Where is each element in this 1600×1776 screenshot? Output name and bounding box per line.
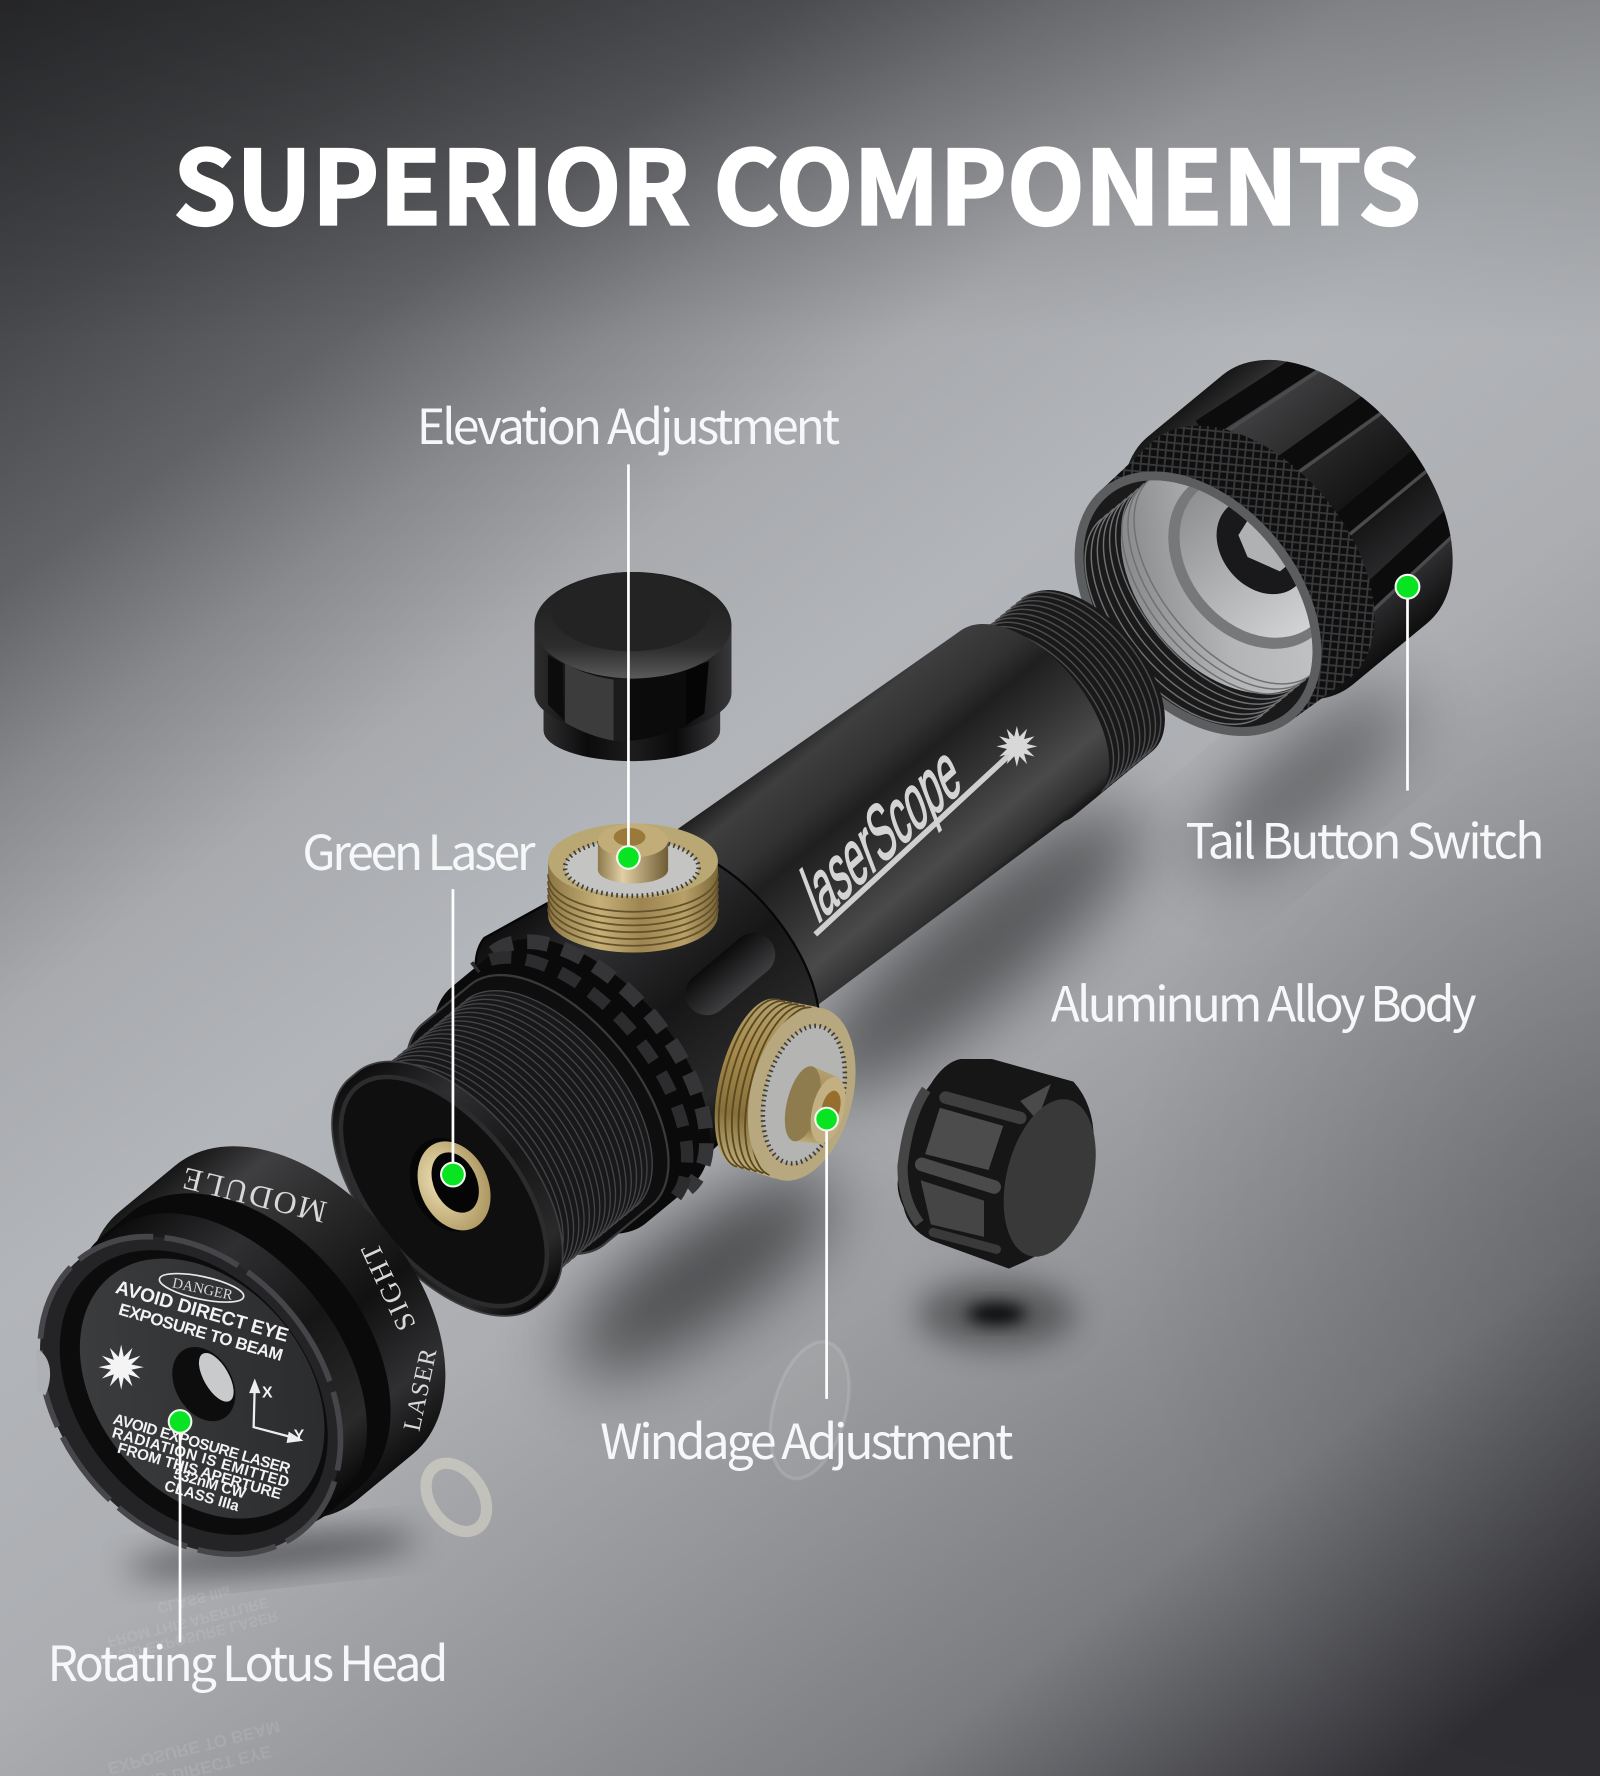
leader: green laser [452, 889, 454, 1175]
lotus side engraving [177, 1160, 443, 1434]
aluminum alloy tube [592, 571, 1141, 1084]
label: tail button switch: Tail Button Switch [1186, 803, 1545, 873]
label: elevation adjustment: Elevation Adjustment [417, 388, 840, 458]
label: rotating lotus head: Rotating Lotus Head [48, 1625, 448, 1695]
marker dots [169, 575, 1419, 1433]
front face [302, 1041, 586, 1343]
label: green laser: Green Laser [302, 814, 536, 884]
cap wall [534, 625, 731, 734]
cap top [551, 572, 710, 651]
lotus side engraving: MODULE [177, 1160, 330, 1230]
leader: rotating lotus head [179, 1421, 181, 1642]
floor reflections: AVOID EXPOSURE LASER [96, 1607, 280, 1667]
cap chamfer highlight [1020, 1084, 1051, 1120]
lotus face markings: Y [294, 1428, 305, 1445]
adjustment block [436, 787, 866, 1218]
groove band [11, 1137, 450, 1588]
side brass turret [699, 988, 873, 1192]
lotus face markings: EXPOSURE TO BEAM [117, 1300, 285, 1365]
logo on tube: laserScope [793, 724, 970, 940]
rear band [26, 1088, 507, 1577]
tail button switch cap [1074, 360, 1453, 736]
block slot [677, 924, 784, 1024]
top brass turret [548, 823, 718, 953]
lotus face markings: AVOID EXPOSURE LASER [111, 1411, 292, 1478]
front plate [30, 1210, 375, 1567]
leader: tail button switch [1406, 587, 1409, 791]
cap ribs [548, 655, 709, 741]
cap chamfer [534, 572, 731, 678]
logo on tube [793, 724, 1037, 940]
laser aperture [395, 1125, 504, 1244]
outer face [0, 1177, 402, 1614]
title: SUPERIOR COMPONENTS [173, 107, 1421, 254]
lotus side engraving: LASER [399, 1345, 443, 1434]
cap rear rim highlight [902, 1090, 926, 1223]
lotus face markings: FROM THIS APERTURE [115, 1440, 283, 1503]
rim and opening [1074, 471, 1322, 736]
lotus face markings [99, 1268, 305, 1515]
lotus face markings: X [262, 1385, 273, 1402]
rotating lotus head [0, 1088, 507, 1622]
leader: elevation adjustment [627, 464, 630, 857]
front flange [365, 937, 709, 1292]
windage dust cap [898, 1059, 1111, 1269]
cap silhouette [898, 1059, 1094, 1269]
front threads [308, 954, 691, 1336]
cap panels [925, 1108, 1003, 1170]
rear threaded section [904, 562, 1194, 851]
floor reflections [96, 1333, 863, 1776]
cap neck [544, 705, 720, 761]
lotus face markings: CLASS IIIa [162, 1478, 241, 1515]
label: windage adjustment: Windage Adjustment [600, 1403, 1013, 1473]
lotus face markings: AVOID DIRECT EYE [113, 1277, 291, 1347]
label: aluminum alloy body: Aluminum Alloy Body [1051, 966, 1477, 1036]
scope main body [275, 500, 1221, 1360]
cap ribs [922, 1098, 1020, 1249]
floor reflections: FROM THIS APERTURE [106, 1593, 270, 1649]
lotus face markings: DANGER [171, 1275, 234, 1304]
cap face [988, 1090, 1111, 1266]
notch in head [36, 1348, 50, 1395]
leader: windage adjustment [825, 1119, 828, 1399]
elevation dust cap [534, 572, 731, 761]
front band [0, 1159, 424, 1603]
lotus face markings: RADIATION IS EMITTED [110, 1424, 291, 1491]
knurled ring [1023, 380, 1424, 786]
rear grip knob [1128, 360, 1453, 698]
knurled gear ring [389, 898, 754, 1275]
floor shadows [124, 664, 1432, 1585]
front lip [289, 1022, 606, 1356]
lotus face markings: 532nM CW [171, 1466, 248, 1503]
lotus side engraving: SIGHT [355, 1236, 423, 1335]
floor reflections: CLASS IIIa [155, 1582, 232, 1615]
